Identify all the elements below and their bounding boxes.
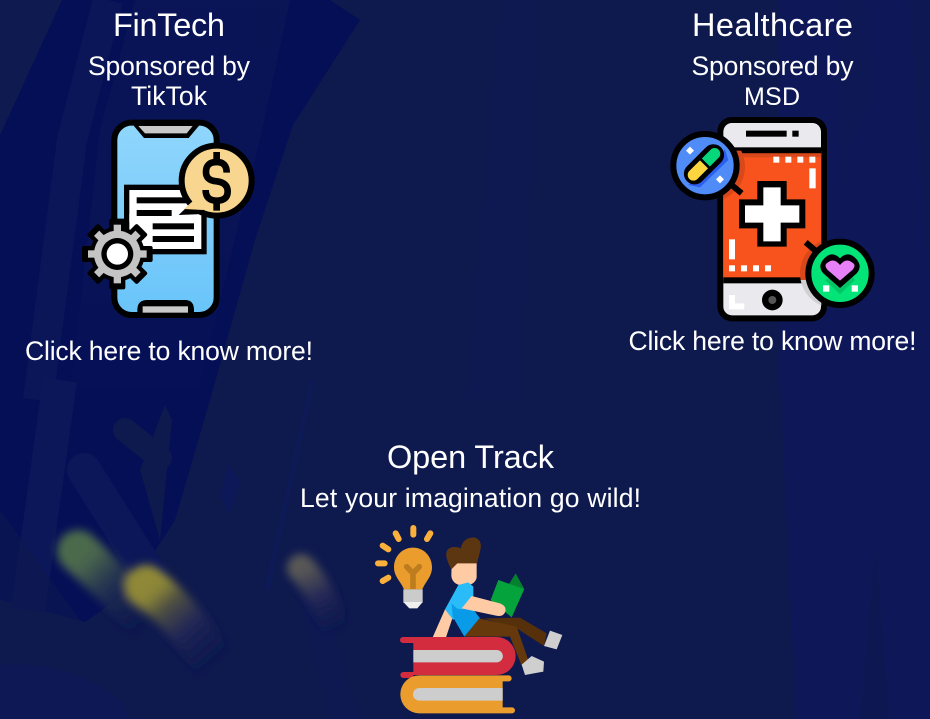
icon: phone with dollar and gear bbox=[82, 121, 252, 317]
sponsor name: MSD bbox=[744, 83, 800, 111]
icon: phone with medical cross bbox=[673, 120, 872, 318]
sponsor line: Sponsored by bbox=[88, 51, 251, 81]
icon: reader on books with light bulb bbox=[378, 528, 562, 713]
sponsor line: Sponsored by bbox=[692, 51, 854, 81]
link: click here: Click here to know more! bbox=[628, 326, 916, 356]
panel: FinTech bbox=[25, 7, 313, 366]
tagline: Let your imagination go wild! bbox=[300, 483, 641, 513]
heading: Healthcare: Healthcare bbox=[692, 7, 853, 43]
panel: Healthcare bbox=[628, 7, 916, 356]
light streaks bbox=[78, 551, 335, 662]
heading: FinTech: FinTech bbox=[113, 7, 225, 43]
panel: Open Track bbox=[300, 439, 641, 713]
sponsor name: TikTok bbox=[131, 81, 208, 111]
heading: Open Track: Open Track bbox=[387, 439, 555, 475]
link: click here: Click here to know more! bbox=[25, 336, 313, 366]
